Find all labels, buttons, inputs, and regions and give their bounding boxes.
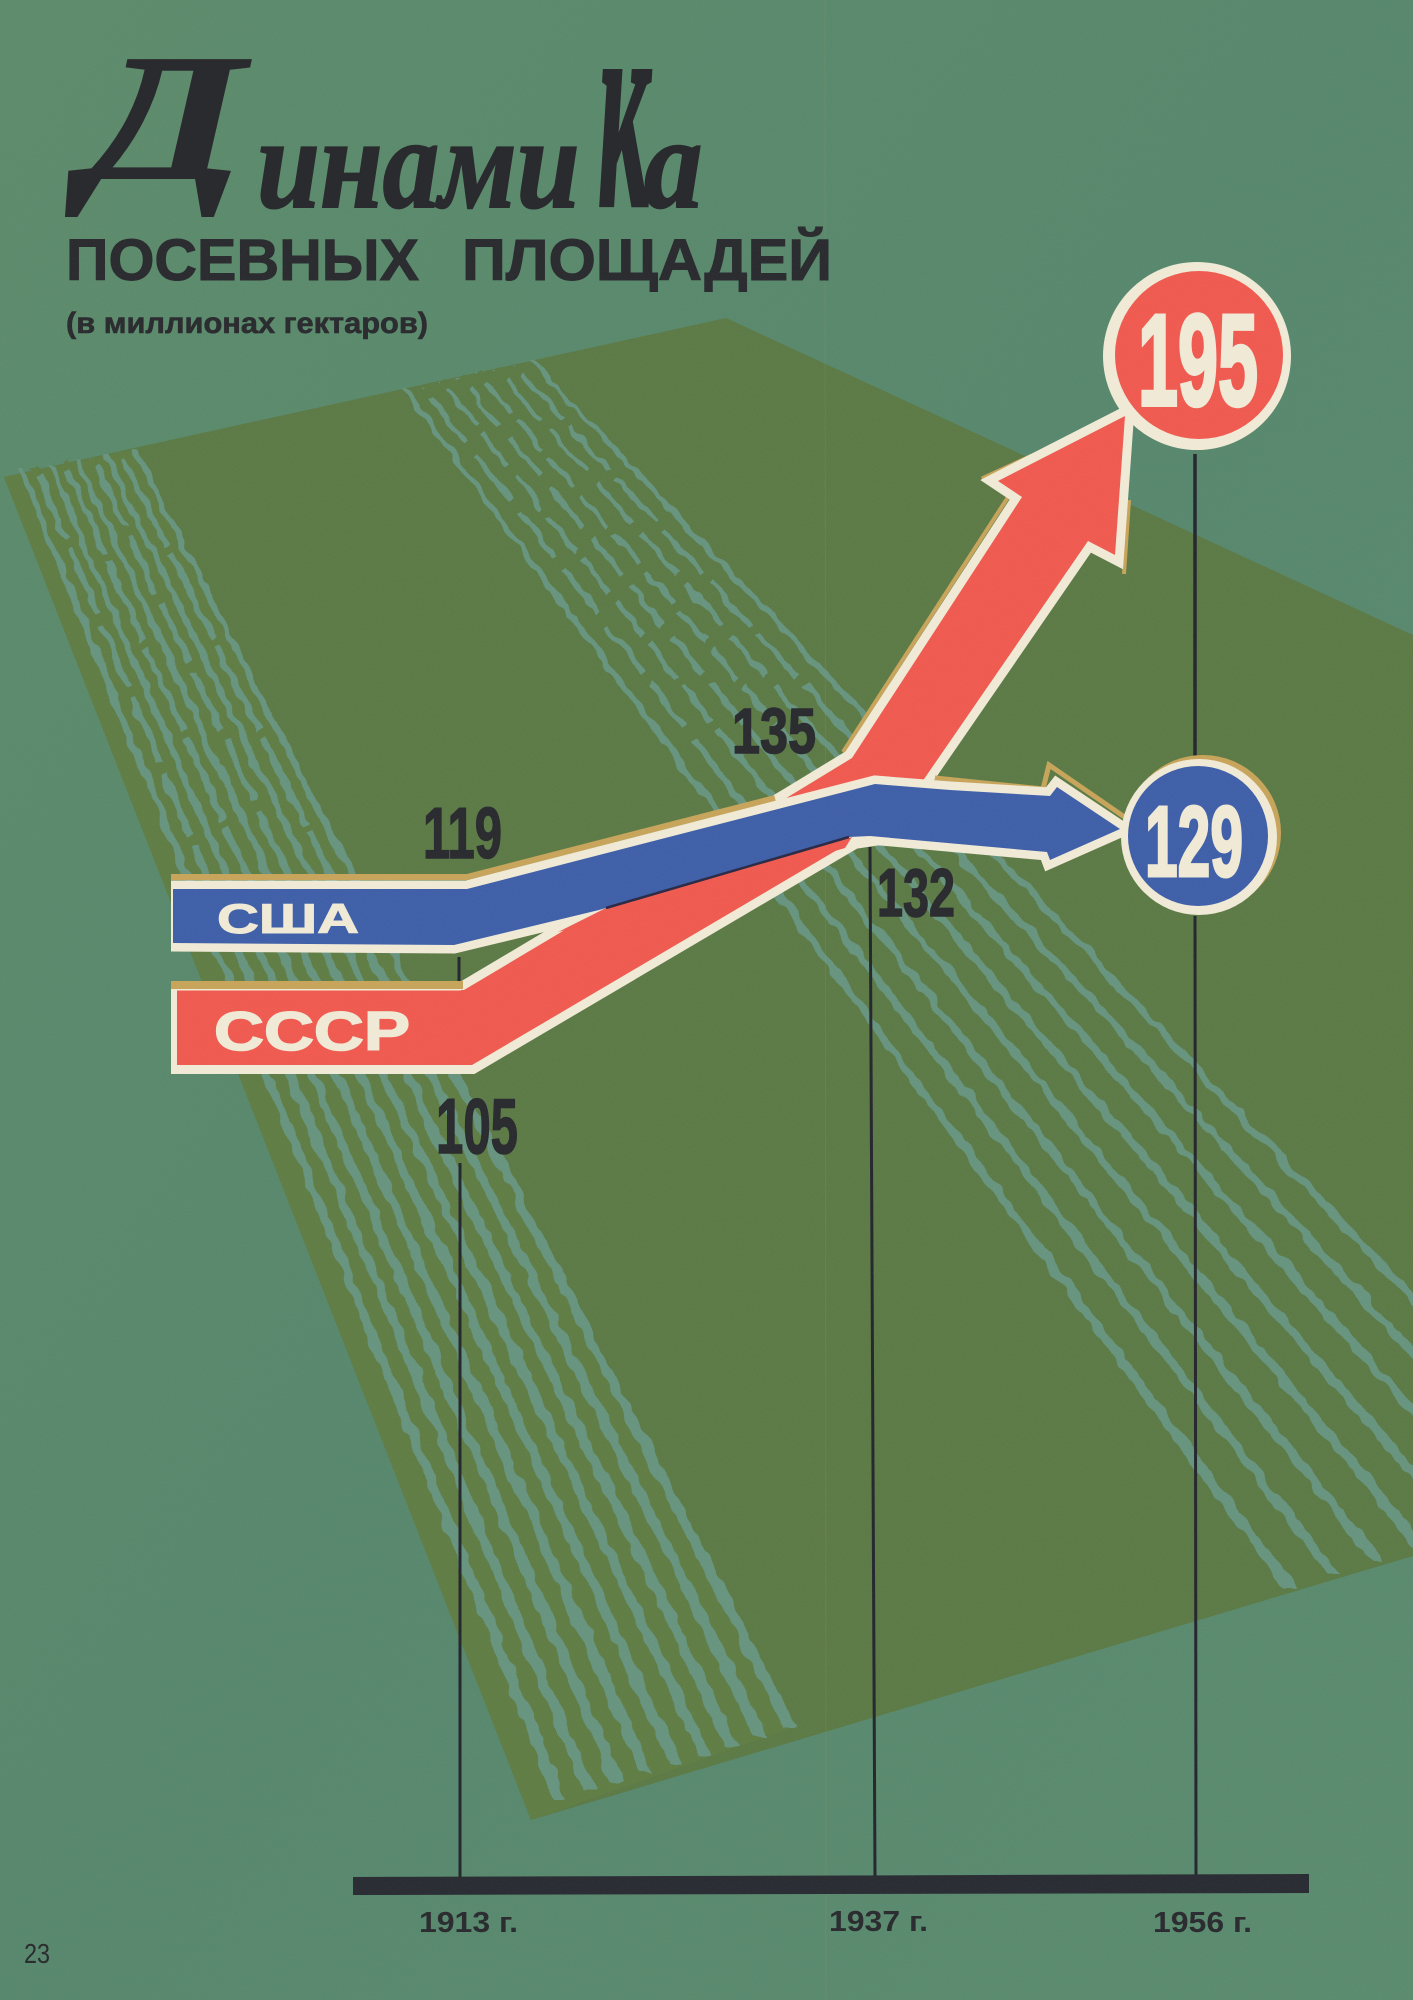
label: USSR: СССР <box>214 1000 410 1062</box>
title: script heading <box>65 0 702 270</box>
field tracks: right furrow band <box>402 363 1413 1589</box>
value: USA 1937: 132 <box>877 855 955 931</box>
axis label 1937: 1937 г. <box>829 1906 928 1938</box>
value: USSR 1937: 135 <box>732 695 816 767</box>
label: USA: США <box>217 895 359 942</box>
title: script heading: Д <box>84 18 244 217</box>
title: script heading: а <box>644 92 702 236</box>
overlap edge between red and blue lines <box>606 837 849 908</box>
subtitle line: sown areas: ПОСЕВНЫХ <box>66 228 419 293</box>
field tracks: left furrow band <box>19 450 797 1800</box>
subtitle line: sown areas: ПЛОЩАДЕЙ <box>462 228 832 293</box>
units note: (в миллионах гектаров) <box>66 307 428 340</box>
axis pointer lines <box>459 454 1196 1878</box>
value: USA 1913: 119 <box>423 794 502 874</box>
time axis bar <box>353 1874 1309 1895</box>
title: script heading: инами <box>257 92 580 236</box>
subtitle line: sown areas <box>66 228 832 293</box>
red sliver directly under the blue line <box>558 837 852 932</box>
page number: 23 <box>24 1938 50 1969</box>
badge: USSR 1956 value 195: 195 <box>1138 287 1258 433</box>
badge: USA 1956 value 129: 129 <box>1145 786 1243 898</box>
arrow: USSR red line rising to 195 <box>171 416 1129 1065</box>
arrow: USA blue line to 129 <box>171 765 1126 945</box>
badge: USA 1956 value 129 <box>1121 755 1281 915</box>
value: USSR 1913: 105 <box>436 1082 518 1170</box>
badge: USSR 1956 value 195 <box>1103 262 1291 450</box>
field: olive ploughed plot <box>4 318 1413 1820</box>
fold line <box>825 0 826 2000</box>
axis label 1956: 1956 г. <box>1153 1907 1252 1939</box>
axis label 1913: 1913 г. <box>419 1907 518 1939</box>
